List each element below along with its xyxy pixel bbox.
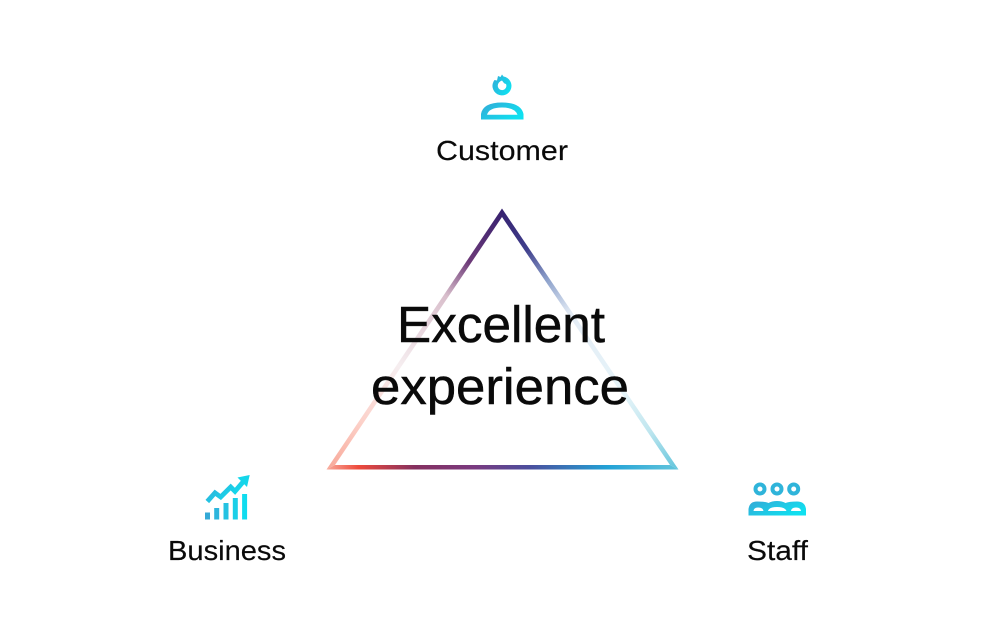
label: Customer: Customer xyxy=(436,135,568,166)
heading: Excellent experience: experience xyxy=(371,358,629,415)
icon: customer xyxy=(481,74,524,120)
triangle outline xyxy=(326,208,678,470)
heading: Excellent experience: Excellent xyxy=(397,296,605,353)
icon: staff group xyxy=(748,484,806,516)
heading: Excellent experience xyxy=(371,296,629,415)
icon: business growth chart xyxy=(205,475,250,520)
label: Staff: Staff xyxy=(747,535,808,566)
label: Business: Business xyxy=(168,535,286,566)
